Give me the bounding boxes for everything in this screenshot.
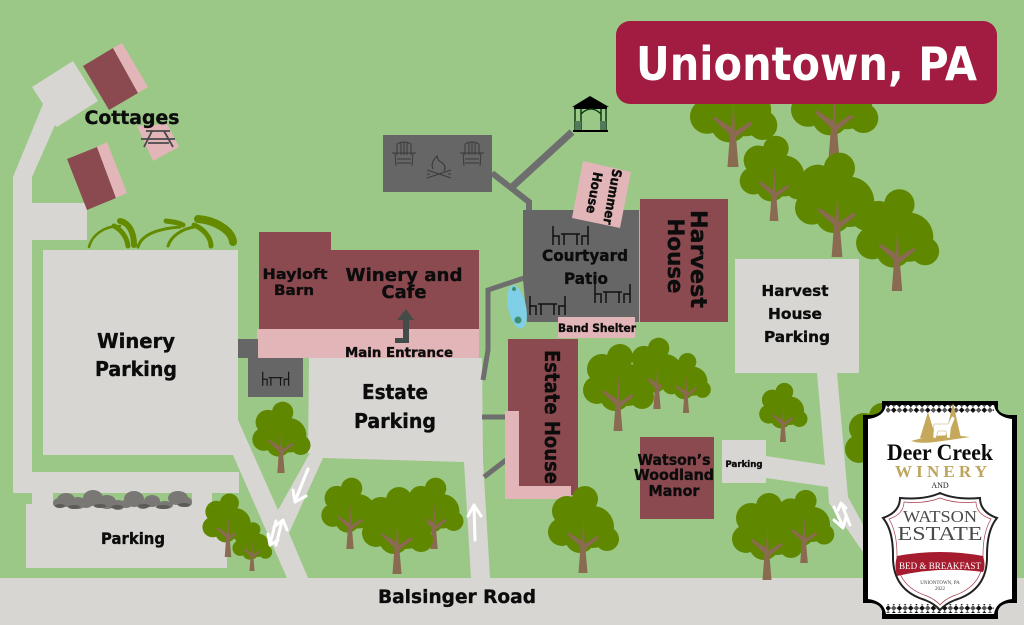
tree <box>362 487 433 574</box>
tree <box>202 493 254 557</box>
panel: Harvest House: House <box>662 218 687 294</box>
panel: Main Entrance porch <box>257 329 479 361</box>
title banner: Uniontown, PA <box>636 37 977 91</box>
tree <box>321 478 380 549</box>
panel: Watson's Woodland Manor <box>634 437 714 519</box>
parking: Winery Parking lot <box>43 250 238 455</box>
title banner <box>616 21 997 104</box>
parking: Watson's small lot <box>722 440 766 483</box>
tree <box>759 383 807 442</box>
patio: small outdoor seating <box>238 339 303 397</box>
parking: Harvest House lot <box>735 259 859 373</box>
text: WINERY: WINERY <box>895 462 987 481</box>
label: Courtyard Patio <box>542 246 628 288</box>
text: Uniontown PA 2022: 2022 <box>935 587 946 592</box>
icon: gazebo <box>572 96 609 132</box>
icon: adirondack chair left <box>392 142 416 166</box>
cottage: upper <box>83 43 148 110</box>
label: Harvest House Parking <box>762 282 830 346</box>
panel: Courtyard Patio <box>523 210 639 322</box>
icon: campfire <box>427 156 451 178</box>
road: Balsinger Road <box>0 578 1024 625</box>
panel: Summer House <box>572 161 631 228</box>
text: Deer Creek: Deer Creek <box>887 440 993 465</box>
rock wall <box>53 490 192 510</box>
tree <box>845 403 916 490</box>
label: Courtyard Patio: Patio <box>564 269 608 288</box>
label: Harvest House Parking: House <box>768 305 822 323</box>
panel: Harvest House <box>640 199 728 322</box>
ribbon: bed and breakfast: BED & BREAKFAST <box>899 562 981 572</box>
label: Winery Parking: Parking <box>95 357 177 381</box>
tree <box>405 478 464 549</box>
trees <box>202 53 939 580</box>
tree <box>690 60 777 167</box>
panel: Summer House: Summer <box>599 168 624 226</box>
arrows: white driving directions <box>268 469 850 545</box>
tree <box>232 522 272 571</box>
icon: table right <box>595 284 630 303</box>
label: small Parking: Parking <box>726 460 762 470</box>
tree <box>583 344 654 431</box>
label: Winery and Cafe: Winery and <box>346 265 462 286</box>
panel: Main Entrance porch: Main Entrance <box>345 346 453 361</box>
labels: parking and road names <box>84 107 830 608</box>
label: Winery and Cafe <box>346 265 462 303</box>
label: Estate Parking: Estate <box>362 380 428 404</box>
arrow: to main entrance <box>395 309 414 343</box>
panel: Band Shelter: Band Shelter <box>558 321 636 335</box>
icon: deer and trees <box>911 403 970 443</box>
tree <box>548 486 619 573</box>
label: Hayloft Barn: Hayloft <box>262 267 328 283</box>
icon: table left <box>530 296 565 315</box>
checker band bottom <box>886 604 994 613</box>
label: Hayloft Barn <box>262 267 328 299</box>
pond <box>504 284 530 330</box>
tree <box>662 353 711 413</box>
road network and parking lots <box>13 61 866 578</box>
panel: Estate House: Estate House <box>540 350 564 484</box>
label: Harvest House Parking: Parking <box>764 328 830 346</box>
label: Balsinger Road: Balsinger Road <box>378 586 536 608</box>
patio: fire pit <box>383 135 492 192</box>
icon: table top <box>553 226 588 245</box>
text: Uniontown PA 2022: UNIONTOWN, PA <box>920 581 960 586</box>
panel: Watson's Woodland Manor: Woodland <box>634 466 714 484</box>
tree <box>795 153 880 257</box>
label: Estate Parking: Parking <box>354 409 436 433</box>
panel: Hayloft Barn and Winery <box>259 232 479 329</box>
grey walkways <box>482 132 572 477</box>
tree <box>775 490 834 563</box>
checker band top <box>886 405 994 413</box>
shield emblem <box>883 493 997 610</box>
label: Estate Parking <box>354 380 436 433</box>
icon: adirondack chair right <box>460 142 484 166</box>
tree <box>252 402 311 473</box>
panel: Band Shelter <box>558 317 636 338</box>
text: AND: AND <box>931 481 949 490</box>
label: Winery Parking: Winery <box>97 329 175 353</box>
text: WATSON: WATSON <box>903 507 977 526</box>
panel: Summer House: House <box>582 171 604 215</box>
label: Harvest House Parking: Harvest <box>762 282 829 300</box>
tree <box>791 53 878 160</box>
picnic area <box>137 124 179 161</box>
label: Winery and Cafe: Cafe <box>382 282 426 303</box>
text: ESTATE: ESTATE <box>898 523 982 545</box>
panel: Watson's Woodland Manor: Manor <box>648 482 700 500</box>
cottage: lower <box>67 142 127 210</box>
tree <box>856 189 939 291</box>
label: Cottages: Cottages <box>84 107 180 129</box>
tree <box>732 493 803 580</box>
panel: Harvest House: Harvest <box>685 210 710 308</box>
logo: Deer Creek Winery and Watson Estate <box>863 401 1017 619</box>
label: Courtyard Patio: Courtyard <box>542 246 628 265</box>
tree <box>628 338 687 409</box>
tree <box>740 136 809 221</box>
panel: Estate House <box>505 339 578 499</box>
label: Hayloft Barn: Barn <box>274 283 314 299</box>
text: Uniontown PA 2022 <box>920 581 960 592</box>
panel: Watson's Woodland Manor: Watson’s <box>638 451 711 469</box>
label: Winery Parking <box>95 329 177 381</box>
icon: picnic table <box>141 131 175 147</box>
vineyard <box>89 219 233 247</box>
label: lower Parking: Parking <box>101 529 165 548</box>
